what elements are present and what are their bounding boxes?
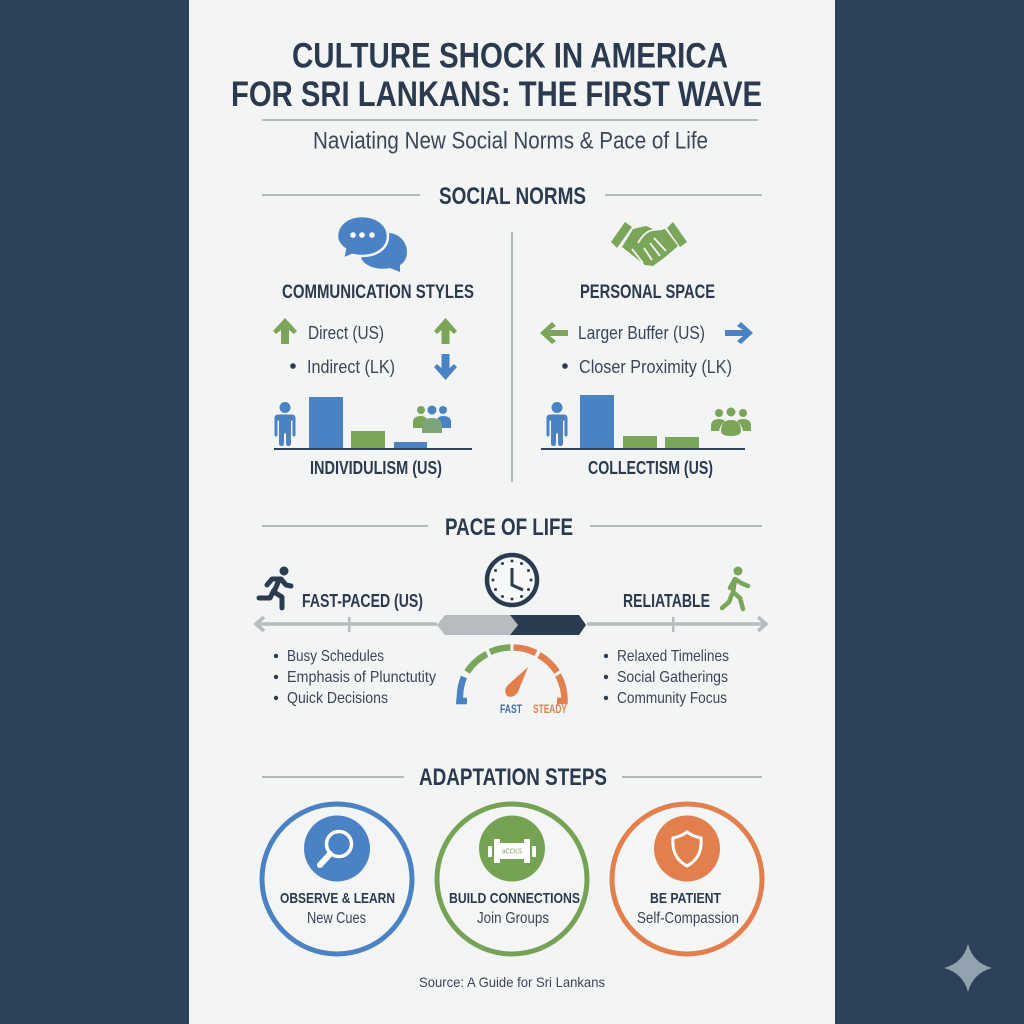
- bar chart: collectivism: [541, 395, 751, 450]
- icon: handshake: [611, 222, 687, 266]
- icon: shield: [673, 832, 701, 866]
- icon: blue down arrow: [434, 354, 457, 380]
- icon: chat bubbles: [337, 216, 407, 272]
- sublabel: new cues: New Cues: [307, 910, 366, 927]
- panel: page background: [189, 0, 835, 1024]
- icon: green group: [711, 408, 751, 436]
- title: CULTURE SHOCK IN AMERICA: [292, 36, 728, 76]
- bar chart: individualism: [274, 397, 472, 450]
- icon: green up arrow: [273, 318, 297, 344]
- title: FOR SRI LANKANS: THE FIRST WAVE: [231, 75, 762, 114]
- step: observe and learn: [262, 804, 412, 954]
- gauge label: fast: FAST: [500, 704, 522, 716]
- icon: green up arrow right: [434, 318, 457, 344]
- label: personal space: PERSONAL SPACE: [580, 282, 715, 303]
- icon: walker: [722, 566, 748, 609]
- label: reliatable: RELIATABLE: [623, 590, 710, 611]
- subtitle: Naviating New Social Norms & Pace of Life: [313, 128, 708, 154]
- gauge label: steady: STEADY: [533, 704, 567, 716]
- bullet and text: indirect: Indirect (LK): [307, 356, 395, 377]
- label: be patient: BE PATIENT: [650, 890, 721, 907]
- icon: green left arrow: [540, 322, 568, 344]
- timeline: [256, 615, 766, 635]
- label: observe: OBSERVE & LEARN: [280, 890, 395, 907]
- list: fast paced traits: Quick Decisions: [287, 690, 388, 707]
- icon: connection bar: aCCKS: [502, 848, 522, 856]
- panel: personal space: [540, 222, 753, 478]
- label: build connections: BUILD CONNECTIONS: [449, 890, 580, 907]
- text: larger buffer: Larger Buffer (US): [578, 322, 705, 343]
- title: [231, 36, 762, 114]
- heading: pace of life: PACE OF LIFE: [445, 514, 573, 541]
- list: fast paced traits: Emphasis of Plunctutity: [287, 669, 436, 686]
- icon: speed gauge: [460, 648, 567, 716]
- label: fast-paced: FAST-PACED (US): [302, 590, 423, 611]
- list: relaxed traits: Social Gatherings: [617, 669, 728, 686]
- icon: sparkle watermark: [944, 944, 992, 992]
- icon: connection bar: [488, 839, 536, 863]
- list: relaxed traits: Relaxed Timelines: [617, 648, 729, 665]
- heading: social norms: SOCIAL NORMS: [439, 183, 586, 210]
- icon: clock: [487, 555, 537, 605]
- label: communication styles: COMMUNICATION STYLES: [282, 282, 474, 303]
- icon: blue right arrow: [725, 322, 753, 344]
- source note: Source: A Guide for Sri Lankans: [419, 974, 605, 990]
- step: build connections: [437, 804, 587, 954]
- text: direct: Direct (US): [308, 322, 384, 343]
- heading: adaptation steps: ADAPTATION STEPS: [419, 764, 607, 791]
- step: be patient: [612, 804, 762, 954]
- sublabel: self-compassion: Self-Compassion: [637, 910, 739, 927]
- list: fast paced traits: [274, 648, 436, 707]
- caption: individulism: INDIVIDULISM (US): [310, 457, 442, 478]
- list: fast paced traits: Busy Schedules: [287, 648, 384, 665]
- icon: magnifying glass: [320, 832, 352, 865]
- list: relaxed traits: Community Focus: [617, 690, 727, 707]
- panel: pace of life: [256, 555, 766, 716]
- icon: group: [413, 406, 451, 433]
- panel: communication styles: [273, 216, 474, 478]
- caption: collectism: COLLECTISM (US): [588, 457, 713, 478]
- icon: runner: [259, 566, 291, 608]
- sublabel: join groups: Join Groups: [477, 910, 549, 927]
- bullet and text: closer proximity: Closer Proximity (LK): [579, 356, 732, 377]
- list: relaxed traits: [604, 648, 729, 707]
